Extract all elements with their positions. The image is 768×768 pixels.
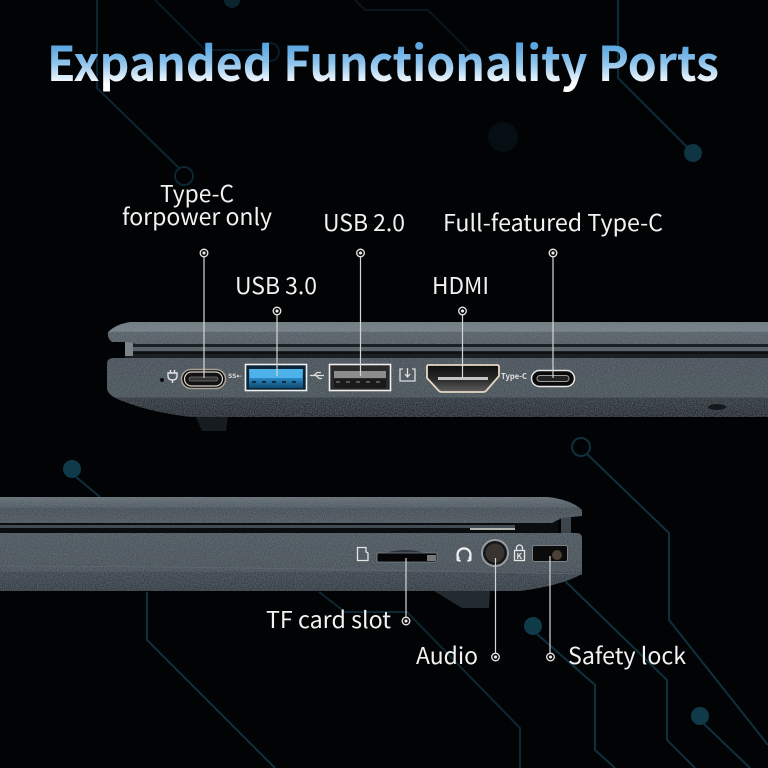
label: Audio: Audio	[416, 637, 478, 671]
top laptop: left side	[107, 322, 768, 431]
icon: lock K	[514, 545, 524, 562]
port: safety lock	[532, 546, 568, 562]
label: Full-featured Type-C: Full-featured Type-C	[443, 204, 663, 238]
port: TF card slot	[377, 550, 437, 562]
rubber foot	[434, 591, 490, 608]
leader lines with end dots	[200, 249, 557, 661]
icon: USB trident	[310, 372, 324, 378]
port: type-C power	[182, 370, 226, 388]
label: USB 3.0: USB 3.0	[235, 267, 317, 301]
icon: lock K: K	[516, 551, 522, 562]
screw	[708, 404, 726, 410]
label: HDMI: HDMI	[432, 267, 489, 301]
port: full-featured type-C	[532, 370, 574, 386]
port: audio jack	[482, 540, 508, 566]
label: TF card slot: TF card slot	[266, 601, 391, 635]
icon: SS USB mark: SS⇠	[228, 371, 242, 380]
label: Type-C for power only: Type-C	[160, 175, 234, 209]
base	[107, 358, 768, 417]
icon: display output	[400, 368, 415, 381]
lid	[108, 322, 768, 344]
bottom laptop: right side	[0, 497, 582, 608]
title: Expanded Functionality Ports	[47, 25, 719, 95]
label: Type-C print: Type-C	[501, 371, 528, 382]
port labels	[122, 175, 686, 671]
hinge gap	[0, 521, 558, 533]
hinge gap	[125, 340, 768, 358]
lid	[0, 497, 582, 523]
label: Type-C for power only: forpower only	[122, 198, 272, 232]
base	[0, 533, 582, 591]
icon: power plug	[168, 370, 177, 383]
label: Safety lock: Safety lock	[568, 637, 686, 671]
port: USB 2.0	[330, 364, 390, 390]
power LED	[160, 378, 164, 382]
icon: SD card	[358, 548, 368, 560]
icon: headphones	[457, 548, 470, 561]
port: USB 3.0	[246, 364, 306, 390]
rubber foot	[195, 415, 228, 431]
label: Type-C for power only	[122, 175, 272, 232]
port: HDMI	[427, 365, 499, 392]
label: USB 2.0: USB 2.0	[323, 204, 405, 238]
